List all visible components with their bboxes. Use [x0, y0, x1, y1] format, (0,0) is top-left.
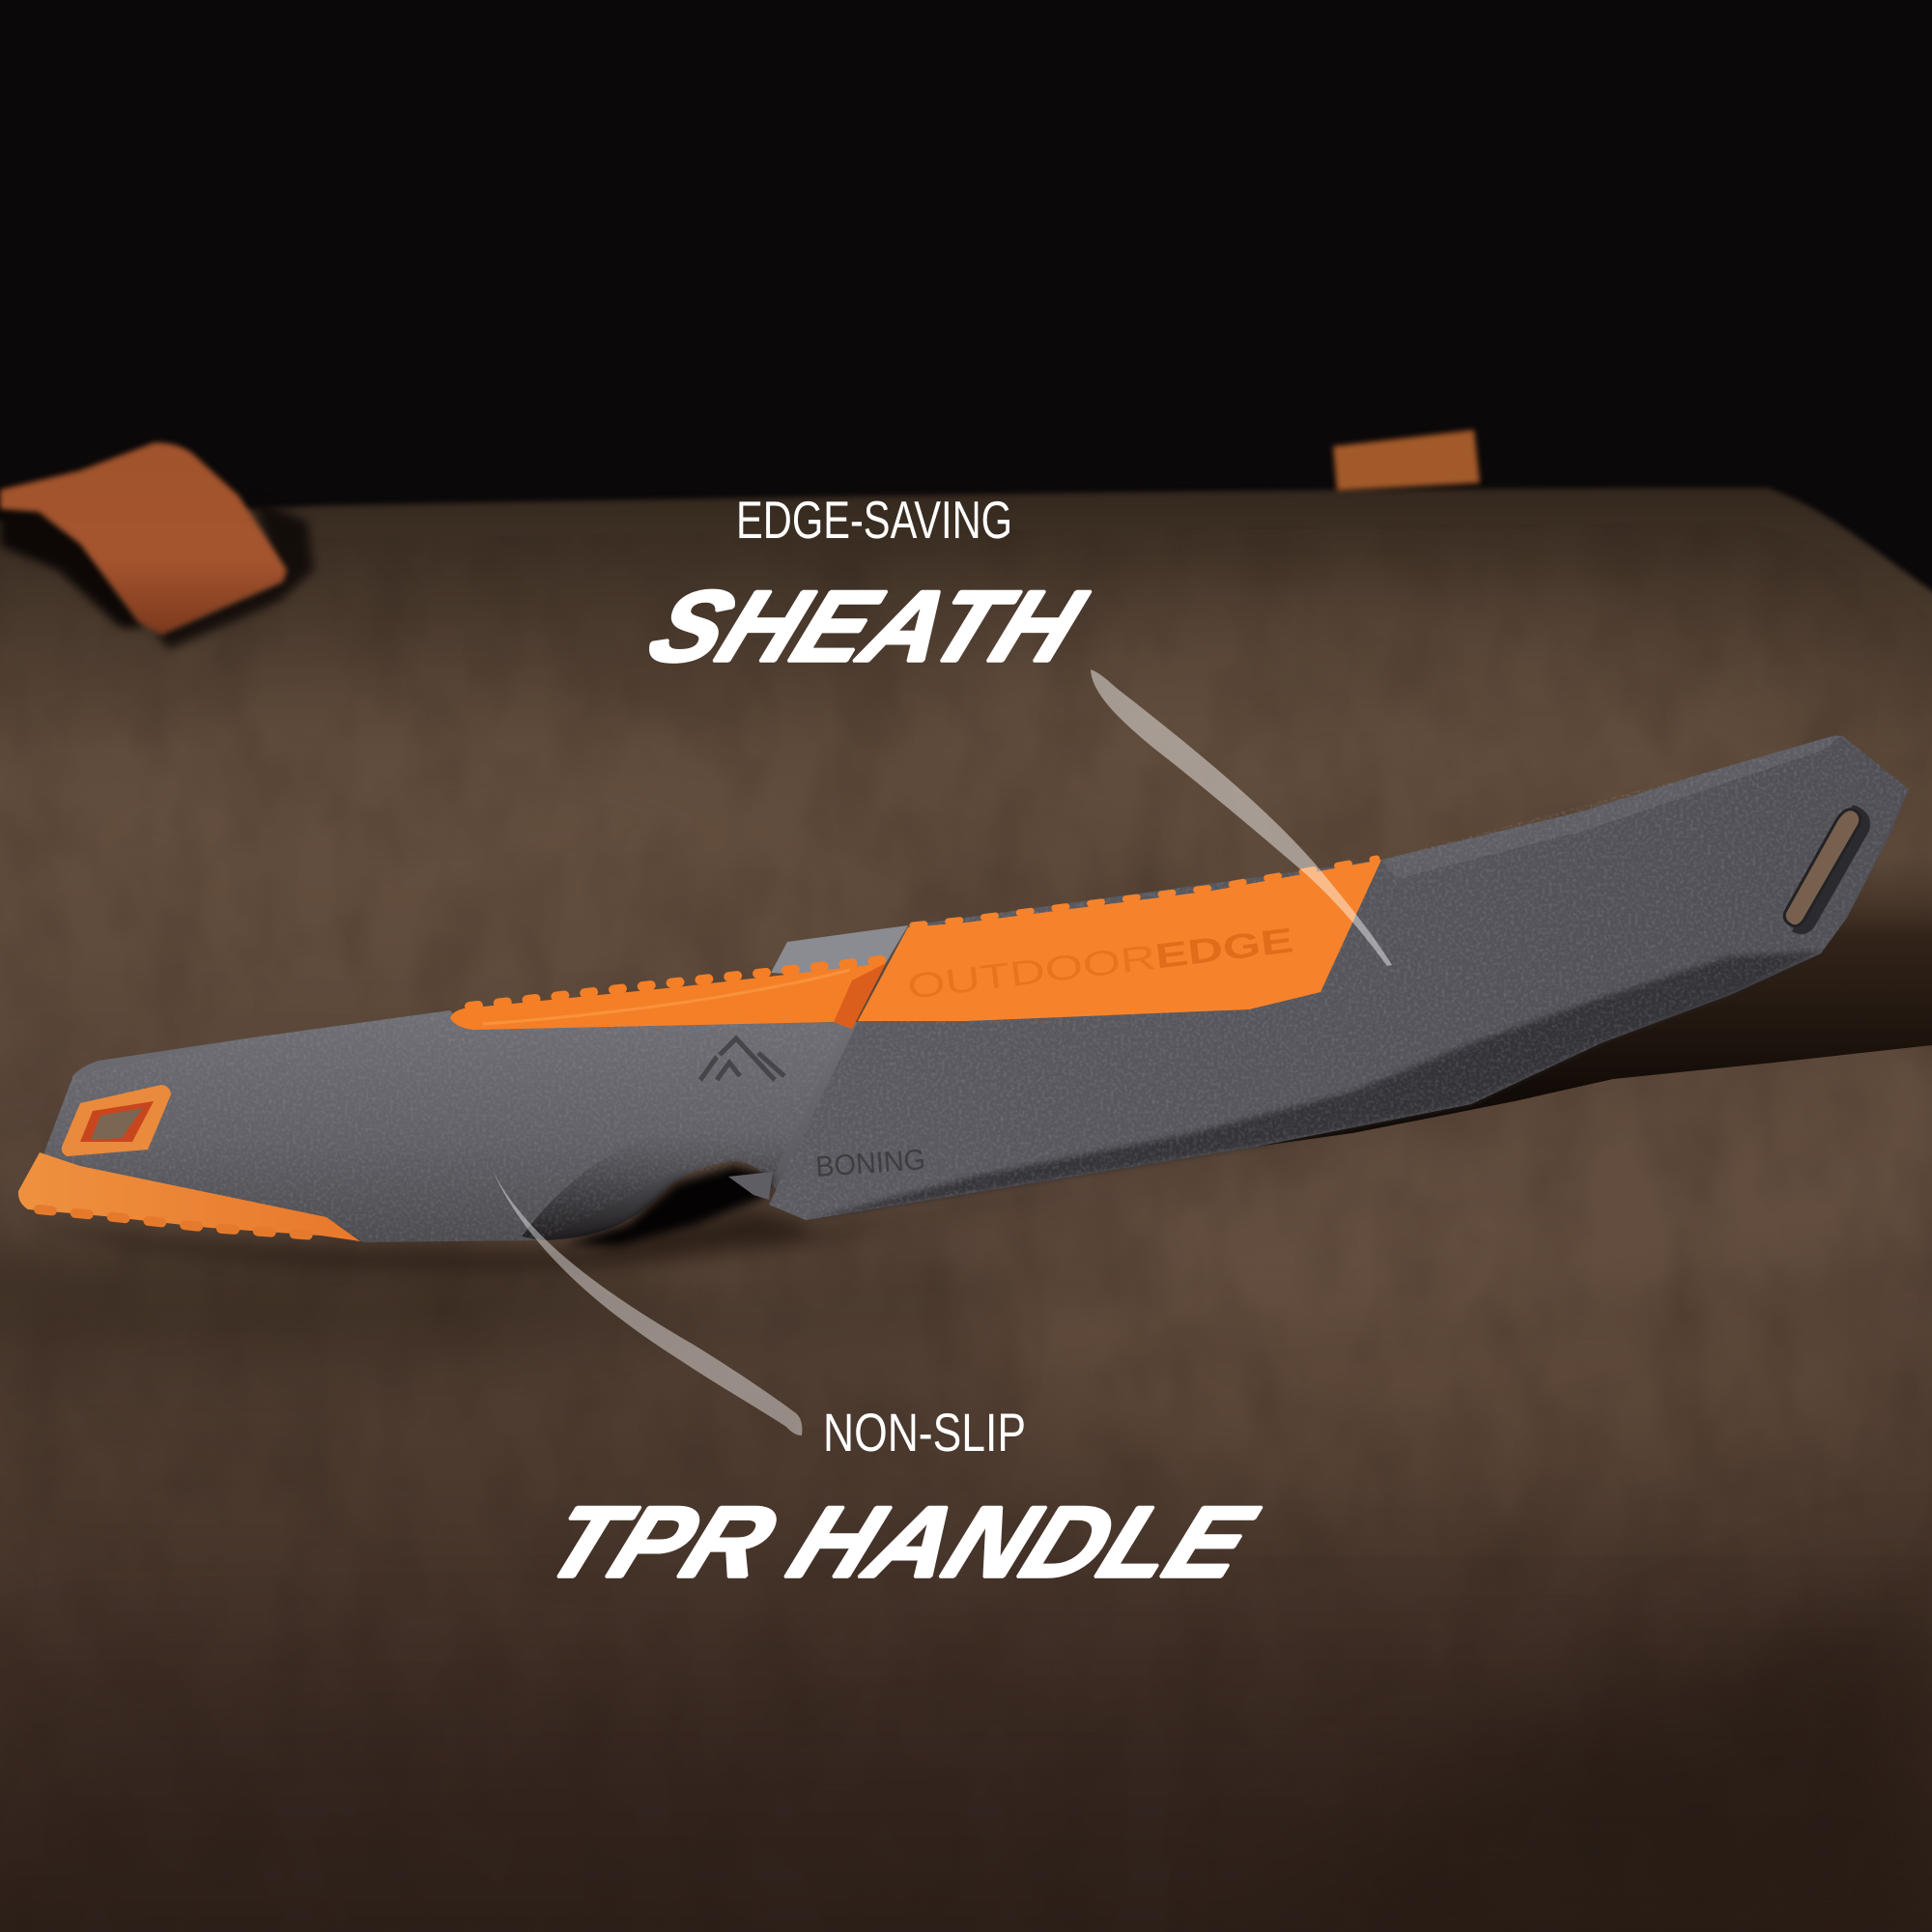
dark fold beneath sheath	[1256, 831, 1932, 1147]
cloth mottling	[0, 522, 1932, 1932]
heading: sheath: SHEATH	[635, 570, 1099, 682]
strap shadow	[0, 497, 314, 649]
callout line: handle	[493, 1171, 802, 1435]
finger groove black shadow	[565, 1166, 773, 1246]
sheath body	[769, 734, 1909, 1220]
heading: tpr handle: TPR HANDLE	[530, 1486, 1270, 1598]
leather strap left	[0, 442, 287, 635]
butt cap orange	[18, 1152, 360, 1241]
label: non-slip: NON-SLIP	[823, 1402, 1026, 1463]
leather tab right	[1333, 430, 1480, 491]
cloth light and shadow folds	[0, 599, 1932, 1932]
handle grip	[43, 1010, 860, 1242]
sheath brand text: OUTDOOR EDGE	[905, 920, 1295, 1007]
exposed blade spine	[771, 925, 908, 978]
handle top orange inlay	[450, 960, 886, 1030]
grip texture	[43, 1010, 847, 1242]
sheath orange panel	[858, 859, 1381, 1021]
label: edge-saving: EDGE-SAVING	[736, 490, 1012, 550]
lanyard hole	[62, 1085, 171, 1156]
lower blade heel	[728, 1172, 773, 1200]
knife	[18, 734, 1909, 1246]
boning label: BONING	[814, 1144, 926, 1183]
callout line: sheath	[1091, 669, 1392, 966]
sheath texture	[769, 734, 1909, 1220]
sheath top bevel	[1381, 736, 1841, 879]
canvas cloth	[0, 488, 1932, 1932]
sheath lower dark band	[806, 952, 1821, 1220]
mountain logo	[700, 1038, 784, 1080]
slot in sheath	[1784, 805, 1870, 934]
finger guard shade	[522, 1130, 792, 1240]
knife contact shadow	[29, 1193, 1063, 1268]
